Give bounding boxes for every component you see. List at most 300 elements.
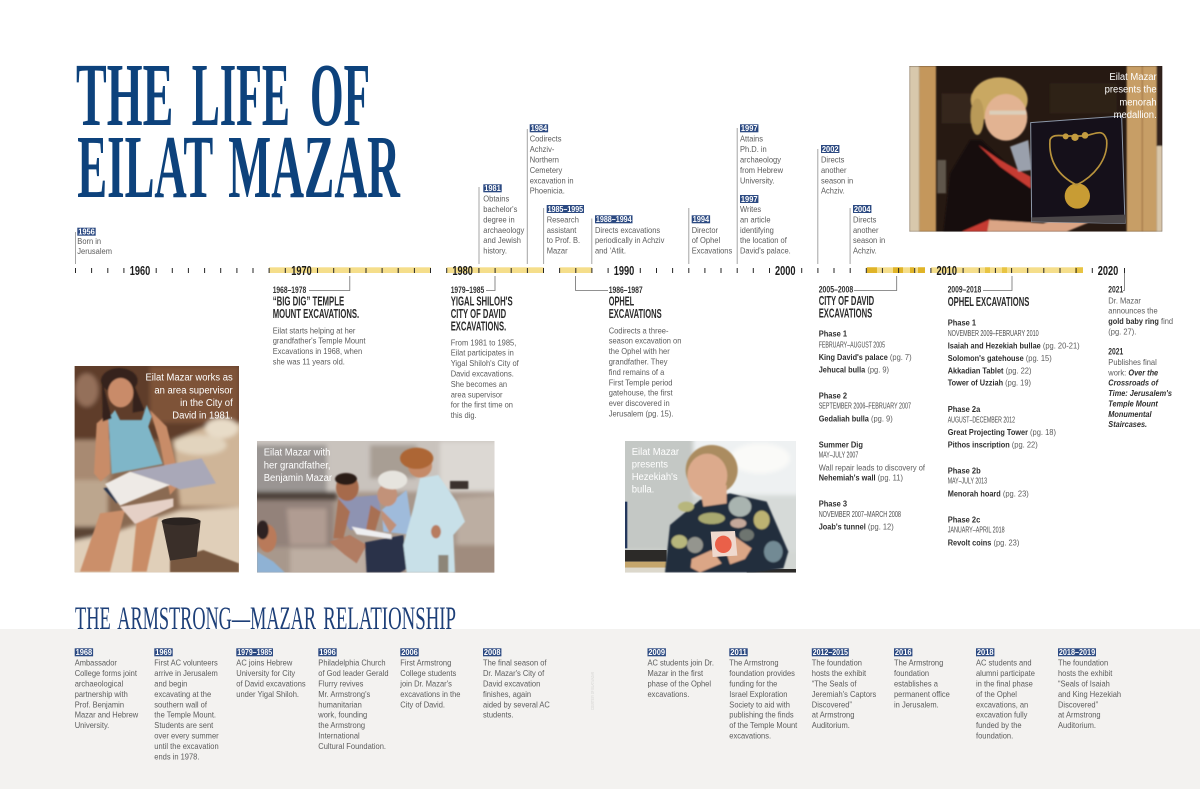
event: 1997 Ph.D. and David's palace article: the location of	[740, 236, 787, 245]
event: 1994 Director of Ophel Excavations: Excavations	[692, 246, 732, 256]
relationship entry: 2018: in the final phase	[976, 679, 1033, 689]
relationship entry: 2018: excavations, an	[976, 700, 1028, 709]
panel: 1979-1985 Yigal Shiloh's City of David excavations: Eilat participates in	[451, 348, 514, 358]
caption: area supervisor: David in 1981.	[172, 410, 233, 421]
phase 2c	[948, 515, 1020, 547]
relationship entry: 2011: foundation provides	[729, 669, 795, 678]
event: 1997 Ph.D. and David's palace article: an article	[740, 215, 771, 225]
panel: 2021 events: work: Over the	[1108, 368, 1158, 377]
title: LIFE	[192, 46, 290, 145]
relationship entry: 2012-2015: at Armstrong	[812, 710, 854, 720]
panel: 1986-1987 Ophel excavations	[576, 276, 681, 419]
relationship entry: 1968: Ambassador	[75, 658, 117, 668]
phase 1: Phase 1	[819, 329, 848, 339]
panel: 1986-1987 Ophel excavations: gatehouse, the first	[609, 388, 673, 398]
phase 2b: Phase 2b	[948, 466, 981, 475]
event: 1985-1995 research assistant: to Prof. B.	[547, 236, 580, 245]
heading: The Armstrong-Mazar Relationship: ARMSTRONG—MAZAR	[117, 601, 316, 637]
panel: 1979-1985 Yigal Shiloh's City of David excavations: Yigal Shiloh's City of	[451, 359, 519, 368]
relationship entry: 1968: partnership with	[75, 689, 128, 699]
relationship entry: 1969: First AC volunteers	[154, 658, 218, 668]
relationship entry: 1969: southern wall of	[154, 700, 208, 709]
panel: 2021 events: Temple Mount	[1108, 399, 1158, 409]
relationship entry: 2011: Israel Exploration	[729, 689, 787, 699]
photo: Eilat Mazar presents Hezekiah's bulla	[620, 435, 800, 573]
phase 2: Gedaliah bulla (pg. 9)	[819, 414, 893, 423]
event: 1981 bachelor's degree	[479, 184, 525, 264]
relationship entry: 2008: finishes, again	[483, 689, 531, 699]
relationship entry: 2006: First Armstrong	[400, 658, 451, 668]
title: EILAT	[77, 118, 213, 217]
relationship entry: 1996: the Armstrong	[318, 721, 365, 730]
relationship entry: 2012-2015: Auditorium.	[812, 721, 850, 730]
phase 2a	[948, 405, 1056, 449]
panel: 1979-1985 Yigal Shiloh's City of David excavations: CITY OF DAVID	[451, 307, 506, 321]
panel: 2021 events: Staircases.	[1108, 420, 1147, 429]
panel: 1986-1987 Ophel excavations: First Temple period	[609, 378, 672, 387]
phase 3: NOVEMBER 2007–MARCH 2008	[819, 509, 901, 519]
panel: 1986-1987 Ophel excavations: Jerusalem (pg. 15).	[609, 409, 673, 419]
relationship entry: 2008: David excavation	[483, 679, 540, 689]
panel: 1968-1978 Big Dig: MOUNT EXCAVATIONS.	[273, 307, 359, 321]
summer dig: Summer Dig	[819, 440, 863, 449]
event: 1997 Ph.D. and David's palace article: Attains	[740, 134, 763, 144]
caption: menorah medallion: Eilat Mazar	[1109, 72, 1157, 83]
relationship entry: 1996: 1996	[319, 648, 336, 657]
relationship entry: 2009: AC students join Dr.	[648, 658, 714, 668]
phase 2a: Phase 2a	[948, 405, 981, 414]
event: 1994 Director of Ophel Excavations	[689, 208, 732, 264]
event: 1956 born in Jerusalem: 1956	[78, 228, 95, 237]
panel: 2021 events: Dr. Mazar	[1108, 296, 1141, 305]
relationship entry: 1969: over every summer	[154, 731, 219, 741]
caption: menorah medallion: menorah	[1119, 97, 1157, 108]
panel: 2021 events: Monumental	[1108, 410, 1152, 419]
event: 1956 born in Jerusalem: Jerusalem	[77, 247, 112, 256]
panel: 2021 events: Publishes final	[1108, 358, 1157, 367]
caption: Hezekiah's bulla: Hezekiah's	[632, 472, 678, 483]
caption: Hezekiah's bulla: presents	[632, 459, 668, 471]
relationship entry: 1969: 1969	[155, 648, 172, 657]
relationship entry: 2018-2019: 2018–2019	[1059, 648, 1096, 657]
excavation period: 1986-1987	[559, 267, 592, 273]
event: 2004 Achziv season: Directs	[853, 215, 876, 225]
relationship entry: 2009: phase of the Ophel	[648, 679, 711, 689]
event: 1988-1994 Achziv and Atlit	[592, 215, 665, 264]
excavation period: 1979-1985	[447, 267, 544, 273]
event: 1981 bachelor's degree: 1981	[484, 184, 501, 193]
phase 3: Joab's tunnel (pg. 12)	[819, 522, 894, 532]
relationship entry: 2018-2019: Auditorium.	[1058, 721, 1096, 730]
title: THE	[76, 46, 173, 145]
relationship entry: 1968: University.	[75, 721, 109, 730]
panel: 2021 events	[1107, 273, 1173, 429]
relationship entry: 2011: funding for the	[729, 679, 778, 689]
axis label: 2000: 2000	[775, 264, 796, 278]
event: 1997 Ph.D. and David's palace article: identifying	[740, 225, 774, 235]
relationship entry: 1968: Mazar and Hebrew	[75, 710, 138, 720]
event: 1985-1995 research assistant: Mazar	[547, 246, 568, 256]
event: 1994 Director of Ophel Excavations: Director	[692, 225, 718, 235]
relationship entry: 2016: permanent office	[894, 689, 950, 699]
phase 2	[819, 391, 911, 423]
relationship entry: 1969: the Temple Mount.	[154, 710, 216, 720]
relationship entry: 1969	[154, 648, 219, 761]
relationship entry: 1996: of God leader Gerald	[318, 669, 389, 678]
event: 1997 Ph.D. and David's palace article: 1997	[741, 195, 758, 204]
phase 1: Isaiah and Hezekiah bullae (pg. 20-21)	[948, 341, 1080, 350]
title: OF	[310, 46, 370, 145]
axis label: 1960: 1960	[130, 264, 150, 278]
phase 2a: Pithos inscription (pg. 22)	[948, 440, 1038, 449]
event: 1984 Achziv excavation: Codirects	[530, 134, 561, 144]
relationship entry: 2018	[976, 648, 1035, 741]
phase 1: Jehucal bulla (pg. 9)	[819, 365, 889, 374]
event: 1981 bachelor's degree: history.	[483, 246, 507, 256]
panel: 2009-2018 Ophel excavations	[948, 276, 1080, 547]
phase 1: King David's palace (pg. 7)	[819, 353, 912, 362]
event: 2004 Achziv season: 2004	[854, 205, 871, 214]
panel: 1968-1978 Big Dig: Excavations in 1968, when	[273, 347, 362, 356]
relationship entry: 2011: 2011	[730, 648, 747, 657]
panel: 1986-1987 Ophel excavations: OPHEL	[609, 295, 634, 309]
relationship entry: 2011: excavations.	[729, 731, 771, 741]
relationship entry: 2011: publishing the finds	[729, 710, 794, 720]
phase 1: FEBRUARY–AUGUST 2005	[819, 339, 885, 349]
panel: 1979-1985 Yigal Shiloh's City of David excavations	[451, 276, 519, 420]
event: 2002 Achziv season	[818, 145, 853, 264]
caption: area supervisor: an area supervisor	[154, 385, 233, 396]
relationship entry: 2012-2015: Discovered”	[812, 700, 852, 709]
relationship entry: 2006: excavations in the	[400, 689, 461, 699]
event: 2004 Achziv season: Achziv.	[853, 246, 877, 256]
relationship entry: 2009	[648, 648, 714, 699]
relationship entry: 2011: of the Temple Mount	[729, 721, 798, 730]
title	[76, 46, 401, 217]
panel: 2021 events: 2021	[1108, 284, 1123, 295]
event: 1997 Ph.D. and David's palace article: Ph.D. in	[740, 145, 767, 154]
event: 1988-1994 Achziv and Atlit: Directs excavations	[595, 225, 660, 235]
relationship entry: 1979-1985: University for City	[236, 669, 296, 678]
photo credit: vertical: COURTESY OF EILAT MAZAR	[590, 672, 595, 710]
event: 1997 Ph.D. and David's palace article	[737, 124, 791, 264]
panel: 1979-1985 Yigal Shiloh's City of David excavations: She becomes an	[451, 380, 507, 389]
relationship entry: 2006: City of David.	[400, 700, 445, 709]
phase 2c: Revolt coins (pg. 23)	[948, 538, 1020, 547]
timeline axis	[76, 264, 1124, 278]
event: 1984 Achziv excavation	[527, 124, 574, 264]
relationship entry: 2011: The Armstrong	[729, 658, 779, 668]
relationship entry: 2018-2019: at Armstrong	[1058, 710, 1101, 720]
panel: 2009-2018 Ophel excavations: 2009–2018	[948, 284, 981, 295]
excavation period: 1968-1978	[269, 267, 431, 273]
event: 1988-1994 Achziv and Atlit: periodically in Achziv	[595, 236, 665, 245]
axis label: 2010: 2010	[936, 264, 957, 278]
excavation period: 2009-2018	[931, 267, 1083, 273]
phase 1	[819, 329, 912, 374]
event: 2002 Achziv season: another	[821, 166, 847, 175]
event: 1997 Ph.D. and David's palace article: David's palace.	[740, 246, 791, 256]
event: 1956 born in Jerusalem: Born in	[77, 237, 101, 246]
panel: 1986-1987 Ophel excavations: Codirects a three-	[609, 326, 669, 335]
phase 1: Solomon's gatehouse (pg. 15)	[948, 354, 1052, 363]
caption: Hezekiah's bulla: bulla.	[632, 484, 654, 496]
panel: 1979-1985 Yigal Shiloh's City of David excavations: David excavations.	[451, 369, 514, 379]
relationship entry: 2018: alumni participate	[976, 669, 1035, 678]
phase 3: Phase 3	[819, 499, 848, 509]
relationship entry: 1969: arrive in Jerusalem	[154, 669, 218, 678]
event: 1984 Achziv excavation: excavation in	[530, 176, 574, 185]
event: 1981 bachelor's degree: and Jewish	[483, 236, 521, 245]
relationship entry: 2018-2019: Discovered”	[1058, 700, 1098, 709]
panel: 1968-1978 Big Dig: 1968–1978	[273, 284, 306, 295]
relationship entry: 2016: 2016	[895, 648, 912, 657]
relationship entry: 2018-2019	[1058, 648, 1121, 730]
panel: 1979-1985 Yigal Shiloh's City of David excavations: this dig.	[451, 411, 477, 420]
relationship entry: 2009: 2009	[648, 648, 666, 657]
event: 1988-1994 Achziv and Atlit: and ‘Atlit.	[595, 246, 626, 256]
panel: 1986-1987 Ophel excavations: find remains of a	[609, 368, 665, 377]
relationship entry: 2018-2019: The foundation	[1058, 658, 1108, 668]
relationship entry: 2016: establishes a	[894, 679, 938, 689]
panel: 2005-2008 City of David excavations: CITY OF DAVID	[819, 294, 874, 308]
event: 1997 Ph.D. and David's palace article: Writes	[740, 205, 761, 214]
panel: 1979-1985 Yigal Shiloh's City of David excavations: YIGAL SHILOH'S	[451, 295, 513, 309]
panel: 1979-1985 Yigal Shiloh's City of David excavations: area supervisor	[451, 390, 503, 399]
relationship entry: 1979-1985: under Yigal Shiloh.	[236, 689, 299, 699]
relationship entry: 2011: Society to aid with	[729, 700, 790, 709]
event: 1984 Achziv excavation: Cemetery	[530, 166, 563, 175]
panel: 2009-2018 Ophel excavations: OPHEL EXCAVATIONS	[948, 295, 1029, 309]
event: 1985-1995 research assistant: assistant	[547, 225, 577, 235]
event: 1981 bachelor's degree: degree in	[483, 215, 515, 225]
event: 1997 Ph.D. and David's palace article: archaeology	[740, 155, 782, 165]
relationship entry: 2018-2019: and King Hezekiah	[1058, 689, 1121, 699]
phase 2: Phase 2	[819, 391, 848, 400]
summer dig: Wall repair leads to discovery of	[819, 463, 926, 472]
phase 2a: Great Projecting Tower (pg. 18)	[948, 428, 1056, 437]
event: 2002 Achziv season: Directs	[821, 155, 844, 165]
panel: 2005-2008 City of David excavations: EXCAVATIONS	[819, 307, 872, 321]
relationship entry: 2008	[483, 648, 550, 720]
relationship entry: 1996: work, founding	[317, 710, 367, 720]
event: 1997 Ph.D. and David's palace article: from Hebrew	[740, 166, 783, 175]
excavation period: 2005-2008	[866, 267, 925, 273]
phase 2c: Phase 2c	[948, 515, 981, 524]
event: 1985-1995 research assistant: Research	[547, 215, 579, 225]
relationship entry: 1979-1985: 1979–1985	[237, 648, 273, 657]
phase 2b: Menorah hoard (pg. 23)	[948, 489, 1029, 498]
relationship entry: 2012-2015	[812, 648, 876, 730]
event: 1984 Achziv excavation: Phoenicia.	[530, 186, 565, 196]
relationship entry: 1979-1985	[236, 648, 306, 699]
relationship entry: 1968: archaeological	[75, 679, 123, 689]
event: 2004 Achziv season	[850, 205, 885, 264]
relationship entry: 2006	[399, 648, 461, 709]
phase 2: SEPTEMBER 2006–FEBRUARY 2007	[819, 401, 911, 411]
relationship entry: 2016: The Armstrong	[894, 658, 943, 668]
relationship entry: 2006: College students	[400, 669, 456, 678]
relationship entry: 1996: International	[318, 731, 360, 741]
caption: Hezekiah's bulla: Eilat Mazar	[632, 447, 680, 458]
panel: 2021 events: Crossroads of	[1108, 378, 1159, 388]
relationship entry: 1969: and begin	[154, 679, 187, 689]
relationship entry: 2012-2015: Jeremiah's Captors	[812, 689, 876, 699]
relationship entry: 2006: join Dr. Mazar's	[399, 679, 452, 689]
panel: 1968-1978 Big Dig: Eilat starts helping at her	[273, 326, 356, 335]
event: 1997 Ph.D. and David's palace article: University.	[740, 176, 775, 185]
event: 1994 Director of Ophel Excavations: 1994	[693, 215, 710, 224]
relationship entry: 2009: Mazar in the first	[648, 669, 704, 678]
event: 1985-1995 research assistant: 1985–1995	[548, 205, 584, 214]
panel: 2021 events: (pg. 27).	[1108, 327, 1136, 337]
relationship entry: 2018-2019: hosts the exhibit	[1058, 669, 1113, 678]
panel: 1968-1978 Big Dig: grandfather's Temple Mount	[273, 336, 366, 346]
summer dig	[819, 440, 926, 483]
relationship entry: 2011	[729, 648, 798, 741]
relationship entry: 1968: College forms joint	[75, 669, 138, 678]
caption: menorah medallion: presents the	[1105, 84, 1157, 96]
relationship entry: 1968: Prof. Benjamin	[75, 700, 124, 709]
relationship entry: 2018: of the Ophel	[976, 689, 1017, 699]
relationship entry: 2012-2015: “The Seals of	[812, 679, 857, 689]
relationship entry: 2008: Dr. Mazar's City of	[483, 669, 545, 678]
relationship entry: 1996: Flurry revives	[318, 679, 363, 689]
relationship entry: 2018: AC students and	[976, 658, 1032, 668]
relationship entry: 2012-2015: The foundation	[812, 658, 862, 668]
relationship entry: 1968: 1968	[76, 648, 93, 657]
panel: 1986-1987 Ophel excavations: grandfather. They	[609, 357, 668, 367]
event: 1994 Director of Ophel Excavations: of Ophel	[692, 236, 720, 245]
caption: area supervisor: in the City of	[180, 398, 233, 409]
heading: The Armstrong-Mazar Relationship: RELATIONSHIP	[323, 601, 456, 637]
relationship entry: 2008: The final season of	[483, 658, 547, 668]
relationship entry: 2009: excavations.	[648, 689, 689, 699]
phase 2b	[948, 466, 1029, 498]
event: 1984 Achziv excavation: Northern	[530, 155, 559, 165]
summer dig: MAY–JULY 2007	[819, 450, 859, 460]
relationship entry: 1996	[317, 648, 389, 751]
panel: 1979-1985 Yigal Shiloh's City of David excavations: for the first time on	[451, 400, 513, 410]
event: 2004 Achziv season: another	[853, 225, 879, 235]
panel: 1968-1978 Big Dig	[273, 276, 366, 367]
phase 1: NOVEMBER 2009–FEBRUARY 2010	[948, 328, 1039, 338]
relationship entry: 2016	[894, 648, 950, 709]
phase 1: Akkadian Tablet (pg. 22)	[948, 366, 1032, 375]
event: 1981 bachelor's degree: archaeology	[483, 225, 525, 235]
relationship entry: 2008: students.	[483, 710, 514, 720]
relationship entry: 2018: foundation.	[976, 731, 1013, 741]
summer dig: Nehemiah's wall (pg. 11)	[819, 473, 903, 483]
event: 1997 Ph.D. and David's palace article: 1997	[741, 124, 758, 133]
relationship entry: 2006: 2006	[401, 648, 418, 657]
panel: 1968-1978 Big Dig: “BIG DIG” TEMPLE	[273, 295, 344, 309]
event: 2002 Achziv season: Achziv.	[821, 186, 845, 196]
panel: 2021 events: announces the	[1108, 306, 1158, 316]
relationship entry: 1969: excavating at the	[154, 689, 212, 699]
panel: 2021 events: Time: Jerusalem's	[1108, 389, 1173, 398]
caption: with her grandfather: her grandfather,	[264, 460, 330, 471]
relationship entry: 1979-1985: AC joins Hebrew	[236, 658, 292, 668]
phase 1	[948, 318, 1080, 388]
panel: 1986-1987 Ophel excavations: 1986–1987	[609, 284, 643, 295]
panel: 2005-2008 City of David excavations	[819, 276, 926, 532]
relationship entry: 1969: Students are sent	[154, 721, 214, 730]
phase 2a: AUGUST–DECEMBER 2012	[948, 414, 1015, 424]
panel: 1986-1987 Ophel excavations: season excavation on	[609, 336, 681, 346]
phase 2b: MAY–JULY 2013	[948, 476, 987, 486]
event: 1984 Achziv excavation: 1984	[531, 124, 548, 133]
event: 1981 bachelor's degree: Obtains	[483, 194, 509, 204]
caption: with her grandfather: Eilat Mazar with	[264, 447, 330, 459]
panel: 1986-1987 Ophel excavations: EXCAVATIONS	[609, 307, 662, 321]
photo: Eilat Mazar with her grandfather	[257, 441, 494, 573]
panel: 1986-1987 Ophel excavations: the Ophel with her	[609, 347, 670, 356]
caption: area supervisor: Eilat Mazar works as	[145, 372, 233, 384]
title: MAZAR	[228, 118, 401, 217]
relationship entry: 1979-1985: of David excavations	[236, 679, 306, 689]
axis label: 1980: 1980	[452, 264, 473, 278]
event: 1956 born in Jerusalem	[76, 228, 112, 264]
relationship entry: 2018: funded by the	[976, 721, 1022, 730]
event: 1981 bachelor's degree: bachelor's	[483, 205, 517, 214]
panel: 2005-2008 City of David excavations: 2005–2008	[819, 284, 853, 295]
event: 1988-1994 Achziv and Atlit: 1988–1994	[596, 215, 632, 224]
phase 2c: JANUARY–APRIL 2018	[948, 525, 1005, 535]
relationship entry: 2018: 2018	[977, 648, 994, 657]
relationship entry: 1969: until the excavation	[154, 741, 219, 751]
event: 2002 Achziv season: season in	[821, 176, 853, 185]
relationship entry: 2012-2015: hosts the exhibit	[812, 669, 867, 678]
panel: 1979-1985 Yigal Shiloh's City of David excavations: EXCAVATIONS.	[451, 320, 506, 334]
panel: 2021 events: gold baby ring find	[1108, 317, 1173, 326]
phase 1: Tower of Uzziah (pg. 19)	[948, 378, 1031, 388]
relationship entry: 2008: 2008	[484, 648, 501, 657]
caption: with her grandfather: Benjamin Mazar	[264, 473, 333, 484]
panel: 1986-1987 Ophel excavations: ever discovered in	[609, 399, 670, 408]
event: 1985-1995 research assistant	[544, 205, 584, 264]
phase 1: Phase 1	[948, 318, 977, 327]
panel: 1979-1985 Yigal Shiloh's City of David excavations: From 1981 to 1985,	[451, 338, 516, 347]
relationship entry: 2016: foundation	[894, 669, 929, 678]
relationship entry: 2008: aided by several AC	[483, 700, 550, 709]
relationship entry: 1996: Cultural Foundation.	[318, 741, 386, 751]
relationship entry: 2018: excavation fully	[976, 710, 1028, 720]
axis label: 1990: 1990	[614, 264, 634, 278]
axis label: 1970: 1970	[291, 264, 312, 278]
relationship entry: 2018-2019: “Seals of Isaiah	[1058, 679, 1110, 689]
phase 3	[819, 499, 901, 532]
panel: 1979-1985 Yigal Shiloh's City of David excavations: 1979–1985	[451, 284, 484, 295]
event: 2002 Achziv season: 2002	[822, 145, 839, 154]
relationship entry: 2012-2015: 2012–2015	[813, 648, 848, 657]
caption: menorah medallion: medallion.	[1114, 110, 1157, 121]
heading: The Armstrong-Mazar Relationship: THE	[75, 601, 111, 637]
relationship entry: 1969: ends in 1978.	[154, 752, 199, 761]
event: 2004 Achziv season: season in	[853, 236, 885, 245]
panel: 1968-1978 Big Dig: she was 11 years old.	[273, 357, 345, 367]
panel: 2021 events: 2021	[1108, 345, 1123, 356]
relationship entry: 1996: Philadelphia Church	[318, 658, 386, 668]
event: 1984 Achziv excavation: Achziv-	[530, 145, 555, 154]
photo: Eilat Mazar as area supervisor	[70, 360, 243, 577]
relationship entry: 1996: Mr. Armstrong's	[318, 689, 370, 699]
relationship entry: 1968	[75, 648, 138, 730]
axis label: 2020: 2020	[1098, 264, 1118, 278]
relationship entry: 2016: in Jerusalem.	[894, 700, 939, 709]
background band: Armstrong-Mazar relationship	[0, 629, 1200, 789]
photo: Eilat Mazar presents the menorah medallion	[909, 66, 1162, 232]
